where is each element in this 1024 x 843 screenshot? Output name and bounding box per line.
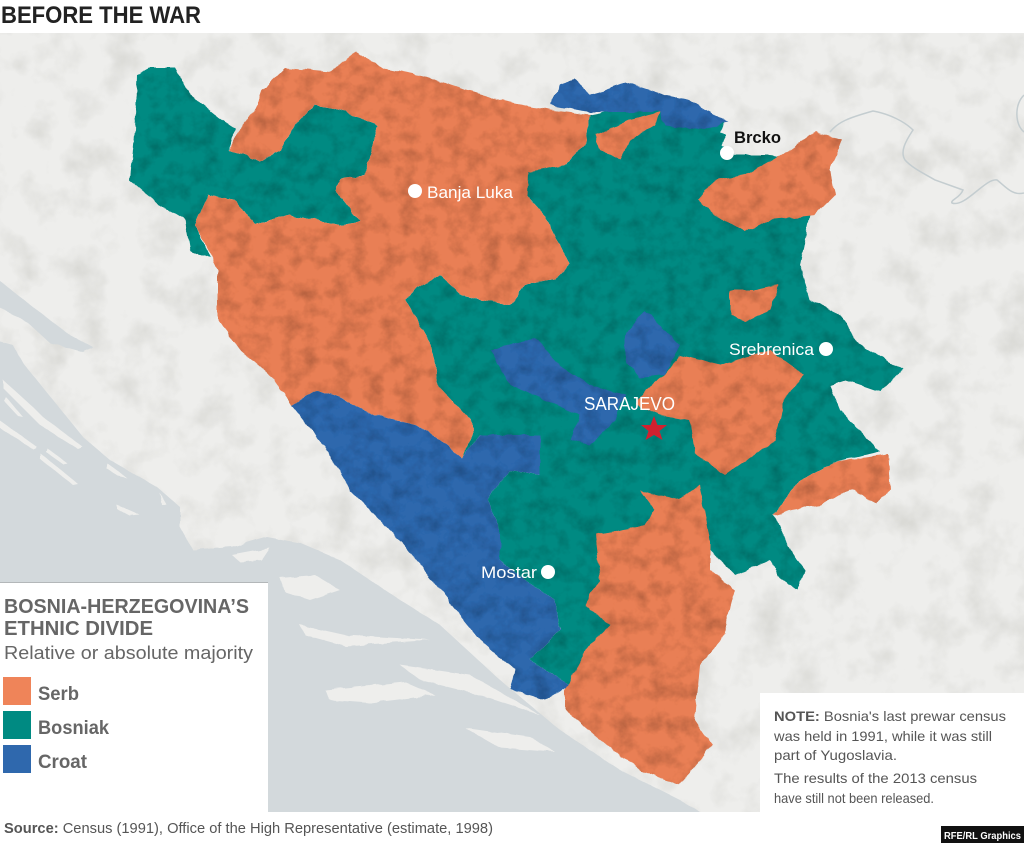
region: Serb south [565,485,735,785]
legend item: Serb [3,677,79,705]
note panel [760,693,1024,812]
region: Serb centre east [635,350,805,475]
note panel: was held in 1991, while it was still [773,728,992,744]
legend subheading: Relative or absolute majority [4,642,254,663]
legend item: Bosniak [3,711,109,739]
legend heading line two: ETHNIC DIVIDE [4,618,153,640]
note panel: have still not been released. [774,790,934,806]
title: BEFORE THE WAR [1,2,201,29]
legend item: Bosniak: Bosniak [38,718,109,739]
city: Srebrenica: Srebrenica [729,340,815,359]
region: Croat centre north [625,310,680,378]
legend item: Serb: Serb [38,684,79,705]
footer band [0,812,1024,843]
note panel: part of Yugoslavia. [774,747,897,763]
legend item: Croat [3,745,88,773]
city: Sarajevo capital with star [584,394,675,440]
region: Croat southwest [292,390,570,700]
city: Sarajevo capital with star: SARAJEVO [584,394,675,414]
base map: Adriatic sea and islands [0,277,705,815]
note panel: The results of the 2013 census [774,770,977,786]
legend panel [0,582,268,812]
city: Mostar: Mostar [481,563,537,582]
city: Brcko: Brcko [734,128,781,147]
city: Brcko [720,128,781,160]
region: Serb northeast [698,132,842,232]
river Sava [830,95,1024,204]
region: Croat centre [490,338,625,445]
region: Serb northwest [195,52,590,458]
region: Serb southeast [773,455,890,515]
region: Bosniak northwest [130,68,378,258]
legend item: Croat: Croat [38,752,88,773]
city: Banja Luka: Banja Luka [427,183,514,202]
source line: Source: Census (1991), Office of the High Representative (estimate, 1998) [4,821,493,837]
credit badge [941,826,1024,843]
map: ethnic majority regions [130,52,903,785]
region: Croat north [550,80,727,130]
region: Serb east small [730,285,778,322]
legend heading: BOSNIA-HERZEGOVINA’S [4,596,249,618]
region: Serb north small [595,112,660,160]
region: Bosniak central and east [405,105,903,685]
note panel: NOTE: Bosnia's last prewar census [774,708,1006,724]
